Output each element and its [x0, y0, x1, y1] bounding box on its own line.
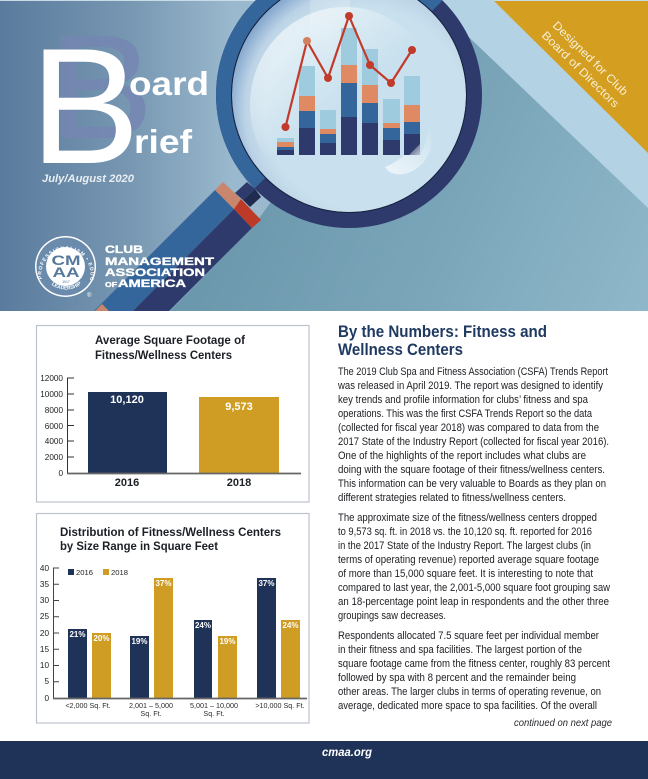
article paragraph 2: groupings saw decreases.	[338, 610, 446, 622]
lens highlight crescent	[385, 128, 431, 174]
ribbon text: Board of Directors	[539, 30, 621, 111]
bar: 2016	[88, 392, 167, 473]
CMAA seal logo	[35, 236, 96, 299]
bar: 2016: 10,120	[110, 394, 144, 406]
article paragraph 1: This information can be very valuable to Boards as they plan on	[338, 478, 606, 490]
legend: 2016	[76, 568, 93, 577]
y axis	[40, 564, 59, 703]
chart title	[95, 333, 245, 362]
association name: MANAGEMENT	[105, 256, 214, 268]
bar value labels: 19%	[219, 637, 236, 646]
article paragraph 2: in the 2017 State of the Industry Report. The largest clubs (in	[338, 540, 591, 552]
article paragraph 2	[338, 512, 610, 622]
y axis	[40, 374, 74, 478]
article paragraph 3: square footage came from the fitness center, roughly 83 percent	[338, 658, 610, 670]
article paragraph 2: to 9,573 sq. ft. in 2018 vs. the 10,120 sq. ft. reported for 2016	[338, 526, 592, 538]
x labels	[115, 477, 251, 489]
y axis: 2000	[45, 453, 63, 462]
CMAA seal logo: ®	[87, 292, 92, 299]
article heading	[338, 323, 547, 359]
article paragraph 3: Respondents allocated 7.5 square feet per individual member	[338, 630, 599, 642]
CMAA seal logo: LEADERSHIP	[52, 282, 80, 290]
article paragraph 1: operations. This was the first CSFA Trends Report so the data	[338, 408, 592, 420]
x labels: 5,001 – 10,000	[190, 701, 238, 710]
y axis: 35	[40, 580, 49, 589]
x labels: Sq. Ft.	[203, 709, 225, 718]
article paragraph 1: was released in April 2019. The report was designed to identify	[337, 380, 604, 392]
bar value labels: 37%	[258, 579, 275, 588]
chart title: Average Square Footage of	[95, 333, 245, 347]
article paragraph 1: key trends and profile information for clubs’ fitness and spa	[338, 394, 588, 406]
y axis: 8000	[45, 406, 63, 415]
magnifying glass lens	[232, 0, 466, 212]
footer bar	[0, 741, 648, 779]
chart title: Distribution of Fitness/Wellness Centers	[60, 525, 281, 539]
x labels: 2018	[227, 477, 251, 489]
article paragraph 3: in their fitness and spa facilities. The largest portion of the	[338, 644, 582, 656]
bar value labels: 24%	[282, 621, 299, 630]
x labels: 2016	[115, 477, 139, 489]
x labels: >10,000 Sq. Ft.	[255, 701, 305, 710]
y axis: 25	[40, 612, 49, 621]
chart title: Fitness/Wellness Centers	[95, 348, 232, 362]
baseline	[67, 472, 301, 474]
ribbon text: Designed for Club	[550, 20, 630, 98]
red trend line	[282, 12, 416, 131]
article paragraph 1	[337, 366, 609, 504]
diagonal light band	[430, 0, 648, 208]
y axis: 5	[44, 677, 49, 686]
article paragraph 3: average, dedicated more space to spa facilities. Of the overall	[338, 700, 597, 712]
issue date: July/August 2020	[42, 173, 135, 185]
bar value labels: 21%	[69, 630, 86, 639]
article paragraph 3	[338, 630, 610, 712]
bar value labels	[69, 579, 299, 646]
y axis: 6000	[45, 422, 63, 431]
association name: OF	[105, 282, 118, 289]
association name: AMERICA	[118, 278, 186, 290]
bar value labels: 19%	[131, 637, 148, 646]
CMAA seal logo: 1917	[62, 280, 70, 284]
article paragraph 1: different strategies related to fitness/wellness centers.	[338, 492, 566, 504]
panel: distribution chart	[36, 514, 309, 723]
x labels: 2,001 – 5,000	[129, 701, 173, 710]
x labels: Sq. Ft.	[140, 709, 162, 718]
y axis: 20	[40, 629, 49, 638]
bars	[68, 578, 300, 698]
y axis: 10000	[40, 390, 63, 399]
x labels	[65, 701, 305, 718]
chart title	[60, 525, 281, 553]
baseline	[53, 698, 307, 700]
article heading: By the Numbers: Fitness and	[338, 323, 547, 341]
continued note: continued on next page	[514, 718, 612, 729]
y axis: 4000	[45, 437, 63, 446]
article paragraph 2: an 18-percentage point leap in respondents and the other three	[338, 596, 609, 608]
newsletter title: oard	[129, 65, 209, 102]
bar value labels: 20%	[93, 634, 110, 643]
article paragraph 1: (collected for fiscal year 2018) was compared to data from the	[338, 422, 599, 434]
ribbon text	[539, 20, 630, 111]
article paragraph 1: The 2019 Club Spa and Fitness Association (CSFA) Trends Report	[338, 366, 608, 378]
newsletter title: rief	[134, 123, 193, 160]
y axis: 30	[40, 596, 49, 605]
association name	[105, 244, 214, 290]
footer bar: cmaa.org	[322, 745, 373, 759]
CMAA seal logo: AA	[52, 264, 80, 280]
header banner	[0, 0, 648, 311]
newsletter title: B	[48, 4, 154, 170]
newsletter title: B	[30, 14, 140, 198]
bar value labels: 37%	[155, 579, 172, 588]
article paragraph 1: doing with the square footage of their fitness/wellness centers.	[338, 464, 605, 476]
panel: average square footage chart	[36, 326, 309, 502]
bar: 2018	[199, 397, 279, 473]
y axis: 40	[40, 564, 49, 573]
article paragraph 2: of more than 15,000 square feet. It is interesting to note that	[338, 568, 593, 580]
bar: 2018: 9,573	[225, 401, 253, 413]
magnifying glass handle	[94, 182, 261, 311]
association name: CLUB	[105, 244, 143, 256]
article paragraph 2: The approximate size of the fitness/wellness centers dropped	[338, 512, 597, 524]
x labels: <2,000 Sq. Ft.	[65, 701, 111, 710]
y axis: 0	[44, 694, 49, 703]
y axis: 0	[58, 469, 63, 478]
article heading: Wellness Centers	[338, 341, 463, 359]
article paragraph 2: compared to last year, the 2,001-5,000 square foot grouping saw	[338, 582, 610, 594]
article paragraph 1: 2017 State of the Industry Report (collected for fiscal year 2016).	[338, 436, 609, 448]
article paragraph 1: One of the highlights of the report includes what clubs are	[338, 450, 586, 462]
magnifying glass ring	[216, 0, 482, 228]
legend	[68, 568, 128, 577]
article paragraph 3: followed by spa with 8 percent and the remainder being	[338, 672, 576, 684]
bar value labels: 24%	[195, 621, 211, 630]
y axis: 10	[40, 661, 49, 670]
legend: 2018	[111, 568, 128, 577]
chart title: by Size Range in Square Feet	[60, 539, 218, 553]
CMAA seal logo: CM	[52, 252, 80, 268]
y axis: 15	[40, 645, 49, 654]
y axis: 12000	[40, 374, 63, 383]
association name: ASSOCIATION	[105, 267, 205, 279]
newsletter title	[30, 4, 209, 198]
stacked bar chart in lens	[277, 28, 420, 155]
article paragraph 2: terms of operating revenue) reported average square footage	[338, 554, 599, 566]
gold corner ribbon	[494, 1, 648, 153]
article paragraph 3: other areas. The larger clubs in terms of operating revenue, on	[338, 686, 601, 698]
